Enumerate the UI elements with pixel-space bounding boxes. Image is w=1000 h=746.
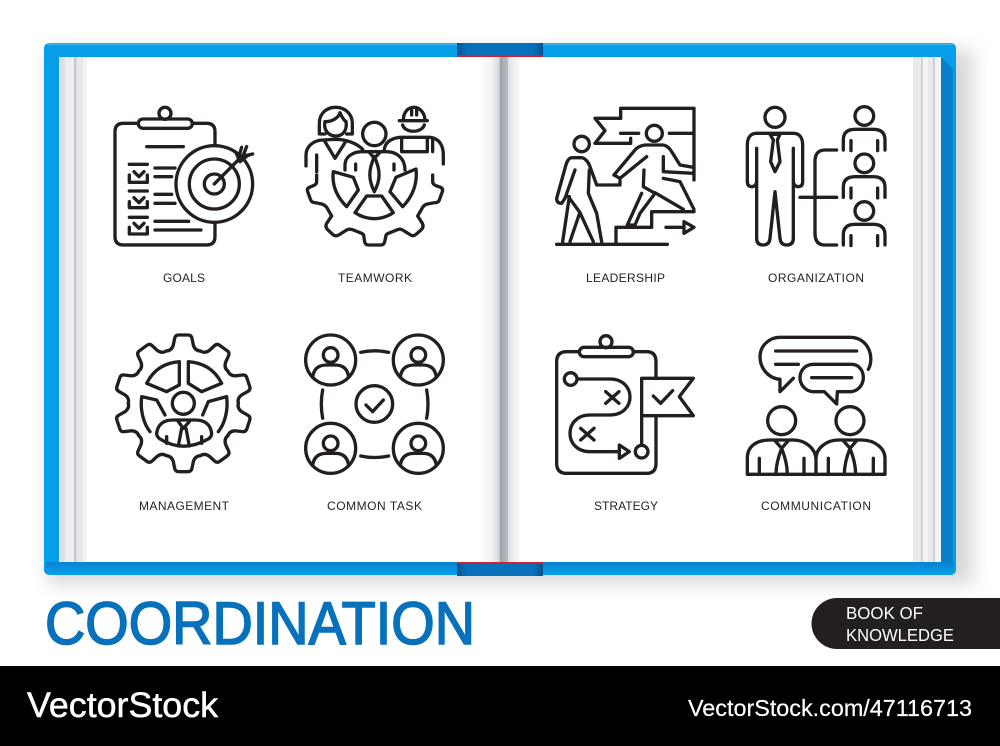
top spine band [457,43,543,57]
icon: organization chart [747,107,885,246]
book shadow [48,50,973,584]
icon: strategy clipboard with route and flag [557,336,693,473]
book gutter [480,57,522,562]
icon: teamwork gear with three people [306,107,443,245]
label: leadership: LEADERSHIP [586,271,665,285]
icon: common task four people around a check [306,335,443,473]
footer bar [0,666,1000,746]
badge: book of knowledge [812,598,1000,649]
label: teamwork: TEAMWORK [338,271,412,285]
open book [44,43,956,576]
footer logo text: VectorStock [27,686,219,725]
title: COORDINATION [45,590,475,657]
pages [59,57,941,562]
right page edges [913,57,941,562]
label: communication: COMMUNICATION [761,499,871,513]
label: common task: COMMON TASK [327,499,422,513]
footer image id: VectorStock.com/47116713 [688,695,972,721]
icon: leadership two figures on stairs [557,108,694,244]
left page edges [59,57,87,562]
icon: management gear with person [113,335,254,472]
label: goals: GOALS [163,271,205,285]
bottom spine band [457,562,543,576]
icon: goals clipboard and target [115,107,253,245]
badge: book of knowledge: KNOWLEDGE [846,625,954,645]
label: management: MANAGEMENT [139,499,230,513]
label: strategy: STRATEGY [594,499,658,513]
book cover [44,43,956,575]
label: organization: ORGANIZATION [768,271,864,285]
icon: communication two people with speech bubbles [747,337,885,474]
badge: book of knowledge: BOOK OF [846,603,923,623]
